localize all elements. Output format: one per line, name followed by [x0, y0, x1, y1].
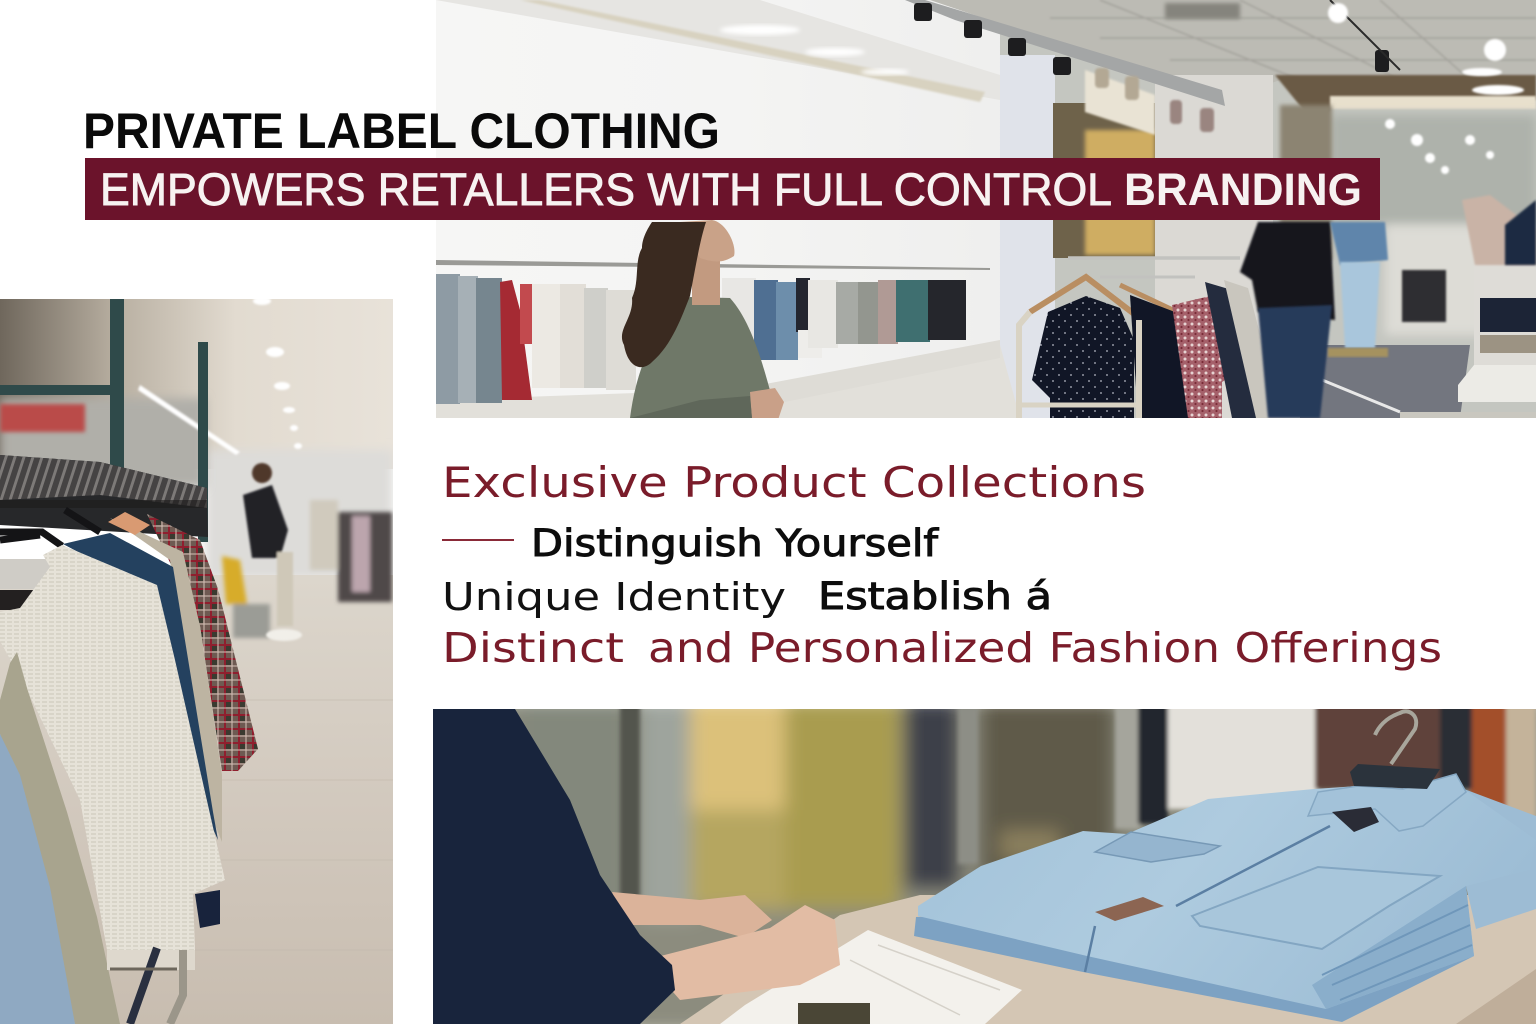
unique identity phrase: Unique Identity	[442, 575, 786, 619]
woman looking at clothing	[622, 220, 784, 420]
right store interior	[930, 0, 1536, 420]
heading line: Exclusive Product Collections	[442, 458, 1146, 507]
fold end creases	[1322, 905, 1472, 1000]
clothing rack with dresses	[1019, 258, 1282, 418]
notebook	[720, 930, 1022, 1024]
store aisle floor	[1300, 345, 1470, 418]
rack posts	[0, 299, 208, 542]
navy sleeve of person	[433, 709, 675, 1024]
ceiling cove	[436, 0, 1000, 102]
plaid shirt	[147, 514, 258, 771]
table	[680, 895, 1536, 1024]
window mullions and wall	[620, 699, 1536, 899]
denim shirt, folded	[914, 774, 1536, 1022]
hanger on the shirt	[1350, 711, 1440, 789]
patterned collar accent	[108, 512, 150, 535]
floor	[0, 575, 393, 1024]
back wall	[205, 450, 393, 580]
banner bar	[85, 158, 1380, 220]
left pocket	[1095, 832, 1220, 862]
distinct word: Distinct	[442, 624, 624, 672]
fold end shadow	[1312, 886, 1474, 1009]
ceiling lights	[138, 297, 302, 455]
olive garment	[0, 652, 120, 1024]
panel: left photo of clothing aisle	[0, 297, 393, 1024]
accent rule	[442, 539, 514, 541]
hanging rail	[0, 455, 208, 537]
navy shirt	[63, 533, 218, 840]
personalized offerings phrase: and Personalized Fashion Offerings	[648, 624, 1442, 672]
rack feet	[107, 948, 195, 1024]
display shelf	[768, 340, 1000, 388]
subtitle banner	[85, 158, 1380, 220]
panel: top photo of retail store	[436, 0, 1536, 420]
track lights	[905, 0, 1400, 132]
ceiling	[0, 299, 393, 469]
leather tag	[1095, 897, 1164, 921]
right pocket	[1192, 867, 1440, 949]
shirt sleeve at right	[1440, 780, 1536, 929]
blurred racks in the distance	[222, 500, 392, 638]
ceiling lights	[1328, 3, 1524, 174]
denim garment	[0, 734, 75, 1024]
hands	[612, 892, 840, 1000]
banner emphasis word: BRANDING	[1124, 164, 1362, 215]
lower folded layer	[914, 900, 1474, 1022]
hangers	[0, 510, 100, 610]
collar	[1308, 774, 1466, 831]
text block: exclusive product collections	[442, 458, 1442, 672]
table edge	[1456, 969, 1536, 1024]
blurred shop window	[515, 709, 1536, 1024]
distinguish line: Distinguish Yourself	[531, 522, 939, 565]
store back wall	[436, 0, 1000, 396]
right edge fixtures	[1458, 195, 1536, 402]
title: private label clothing: PRIVATE LABEL CLOTHING	[83, 103, 720, 159]
clothing rail	[436, 260, 990, 404]
shopper in the distance	[243, 463, 302, 641]
panel: bottom photo of denim shirt on table	[423, 699, 1536, 1024]
background shoppers	[1240, 222, 1446, 418]
beige shirt	[110, 518, 222, 842]
floor	[436, 345, 1020, 418]
neck label	[1332, 807, 1379, 832]
establish phrase: Establish á	[818, 575, 1052, 618]
navy shirt cuff	[195, 890, 220, 928]
placket	[1085, 826, 1330, 972]
banner text: EMPOWERS RETALLERS WITH FULL CONTROL	[100, 164, 1112, 215]
floor planks	[246, 700, 393, 701]
upper fold	[918, 786, 1536, 1009]
white knit sweater	[0, 545, 225, 950]
